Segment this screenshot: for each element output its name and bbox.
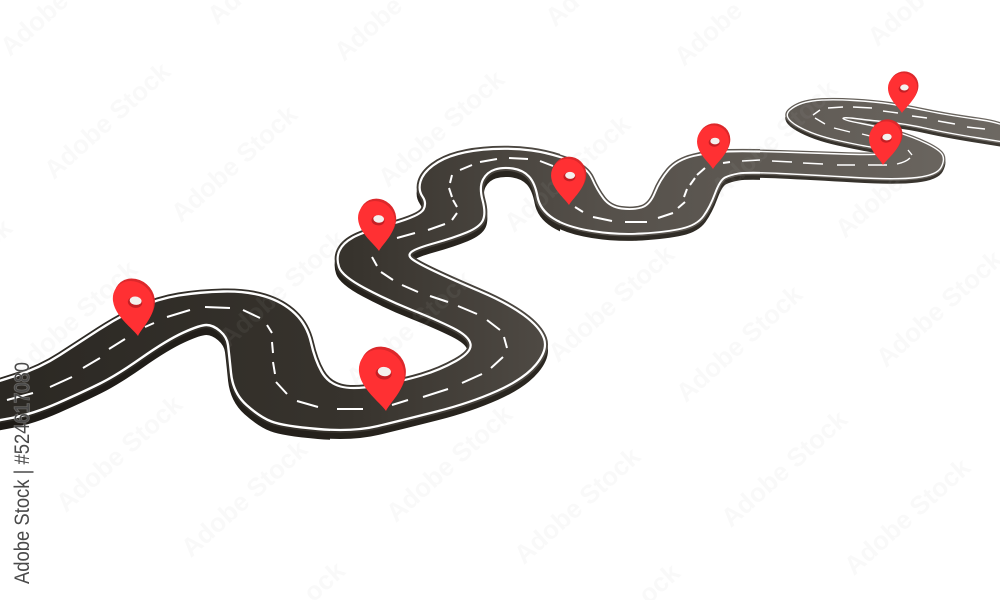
watermark pattern: Adobe Stock — [705, 74, 843, 203]
watermark pattern: Adobe Stock — [670, 279, 808, 408]
road: middle section — [330, 146, 560, 439]
watermark pattern: Adobe Stock — [542, 239, 680, 368]
centre dashes: near — [7, 158, 730, 409]
watermark pattern: Adobe Stock — [838, 452, 976, 581]
road: nearest section — [0, 288, 330, 440]
road: far section — [760, 98, 1000, 184]
watermark pattern: Adobe Stock — [165, 99, 303, 228]
watermark pattern: Adobe Stock — [380, 399, 518, 528]
pin 1 — [110, 278, 160, 336]
winding road — [0, 100, 1000, 437]
watermark pattern: Adobe — [829, 167, 909, 244]
vertical stock credit text: Adobe Stock | #524617080 — [11, 362, 34, 584]
watermark pattern: Adobe Stock — [213, 224, 351, 353]
watermark pattern: Adobe Stock — [50, 389, 188, 518]
watermark pattern: Adobe Stock — [175, 434, 313, 563]
watermark pattern: Adobe Stock — [372, 64, 510, 193]
watermark pattern: Adobe Stock — [5, 254, 143, 383]
pin 2 — [356, 347, 410, 411]
watermark pattern: Adobe Stock — [715, 404, 853, 533]
pin 7 — [887, 71, 919, 113]
watermark pattern: Adobe Stock — [498, 109, 636, 238]
road: upper section — [560, 148, 760, 241]
watermark pattern: Adobe Stock — [38, 56, 176, 185]
pin 4 — [550, 157, 587, 205]
watermark pattern: Adobe Stock — [508, 441, 646, 570]
watermark pattern: Adobe Stock — [340, 264, 478, 393]
location pins — [110, 71, 919, 411]
pin 6 — [867, 119, 904, 165]
pin 5 — [697, 123, 730, 169]
pin 3 — [356, 199, 399, 251]
centre dashes: far — [742, 107, 985, 165]
